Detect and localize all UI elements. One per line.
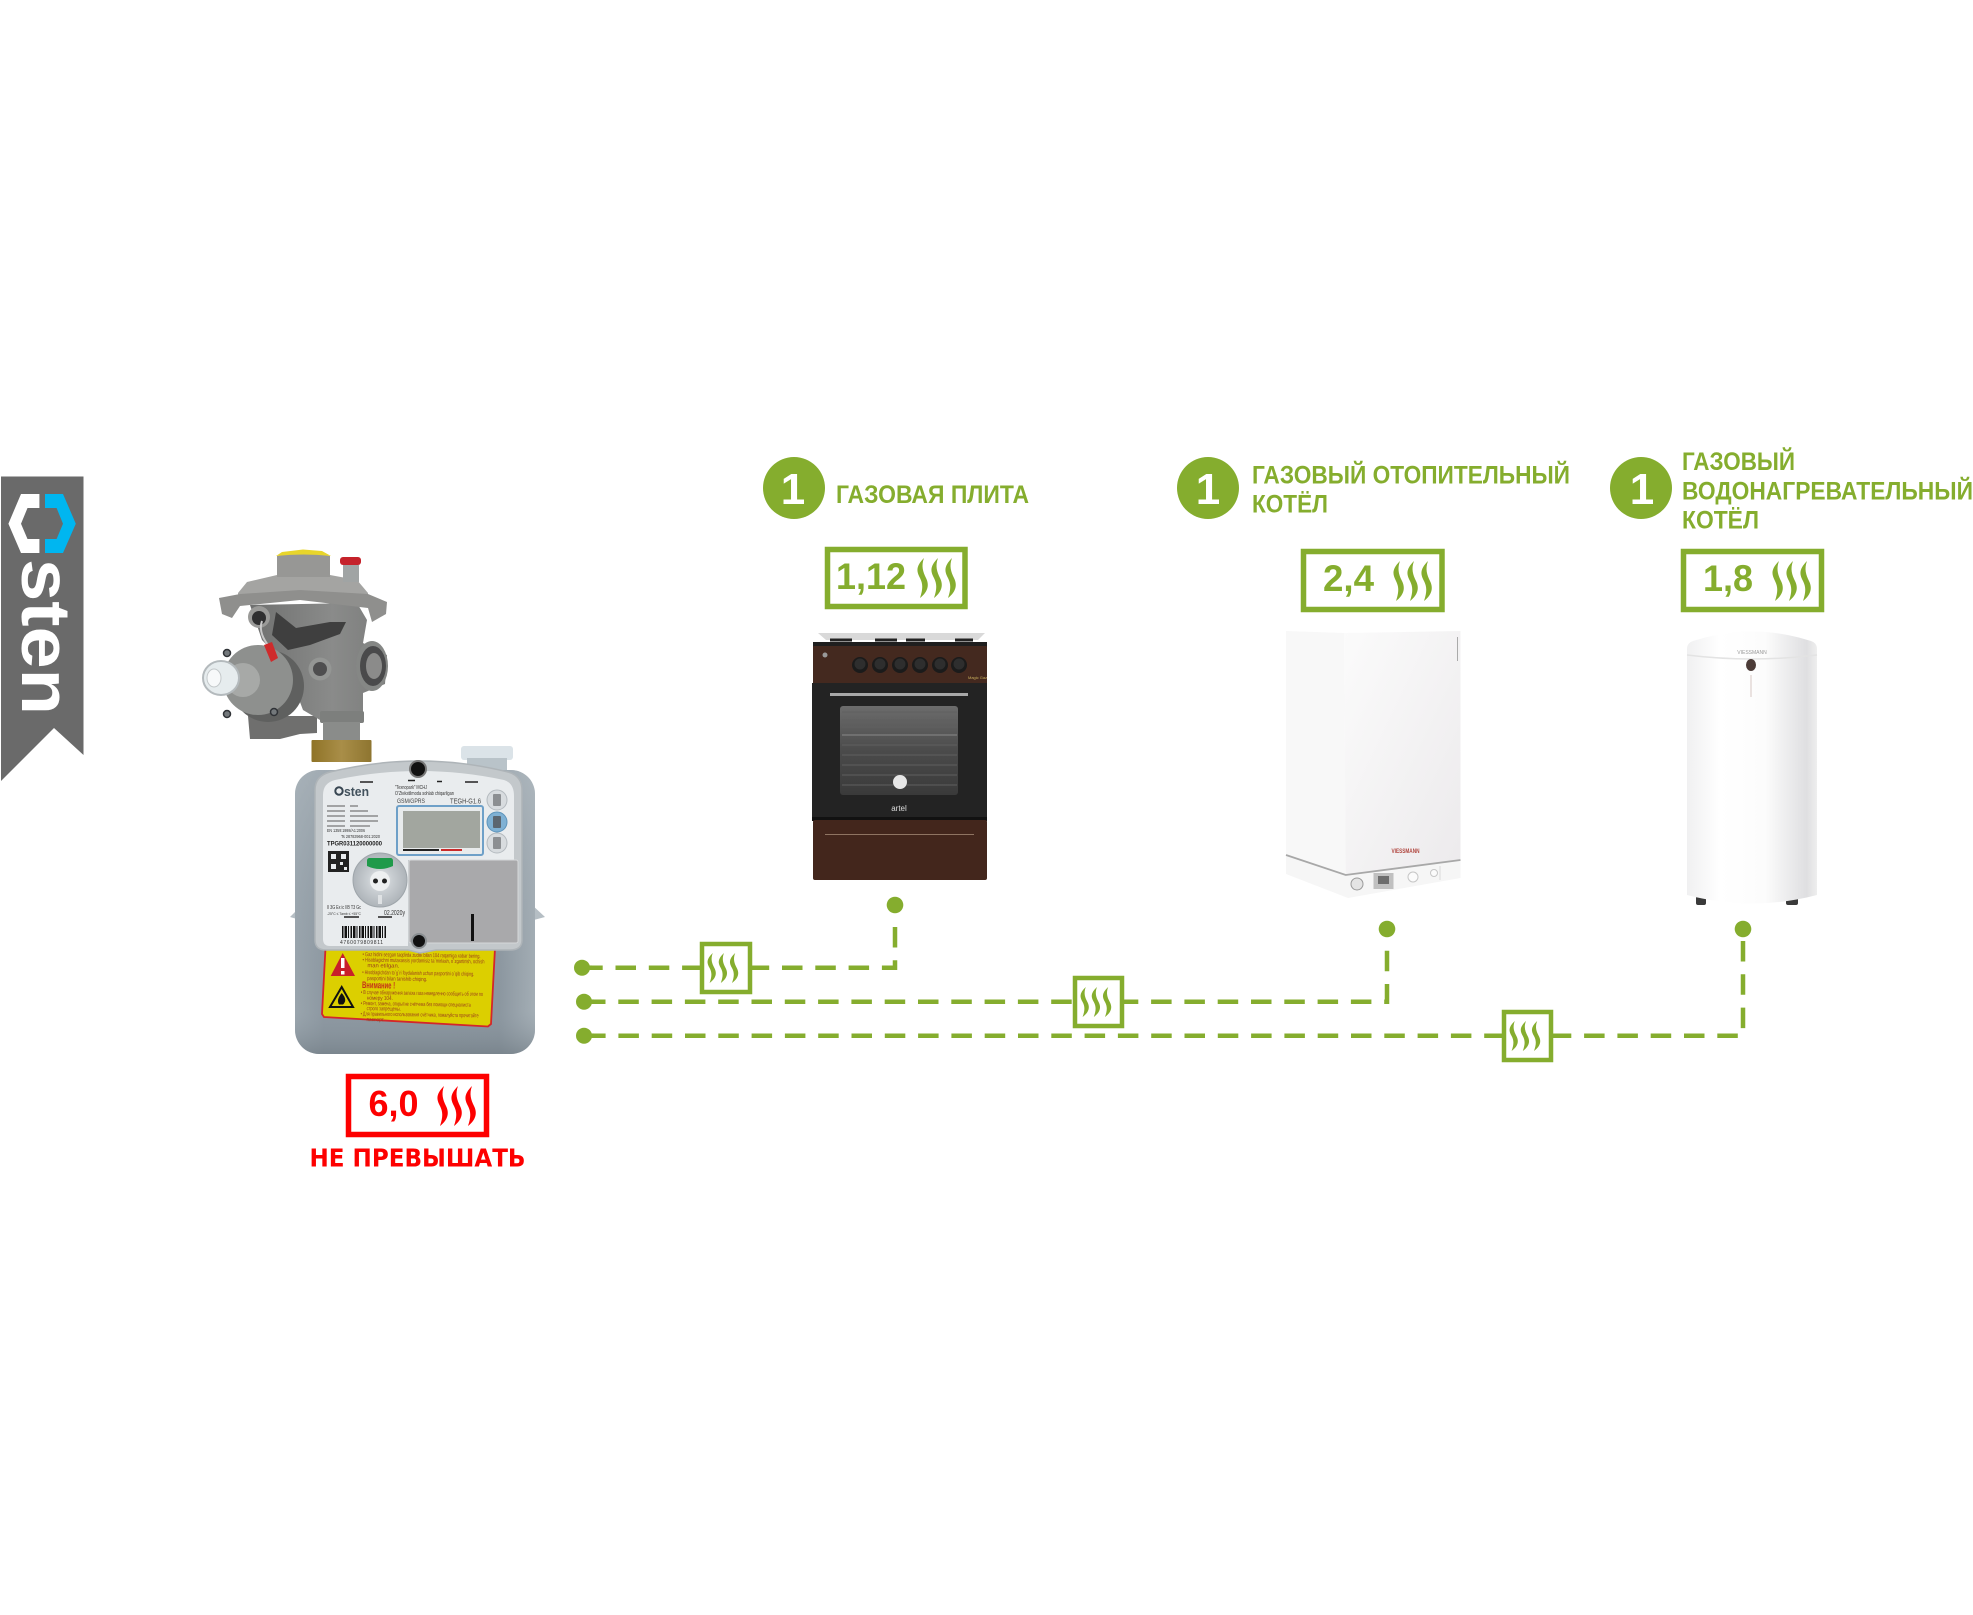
bottom casting [248, 716, 317, 739]
start dot [576, 994, 592, 1010]
meter technical data: TEGH-G1.6 [450, 796, 481, 806]
meter technical data: "Texnopark" MCHJ [395, 785, 427, 791]
warning text: • Hisoblagichdan to`g`ri foydalanish uchun pasportini o`qib chiqing. [362, 970, 475, 978]
bottom seal bolt [412, 934, 426, 948]
consumption box [1304, 552, 1442, 610]
brass nut [312, 740, 372, 762]
barcode: 4760079809811 [340, 940, 384, 946]
flange [219, 590, 387, 622]
meter technical data: TPGR031120000000 [327, 842, 383, 848]
clear bulb [203, 661, 239, 695]
meter buttons [487, 790, 507, 853]
wire and red seal [261, 621, 278, 662]
consumption box [1684, 552, 1822, 610]
warning text: паспорт. [366, 1017, 385, 1023]
screws [224, 650, 278, 718]
warning text: • В случае обнаружения запаха газа немедленно сообщить об этом по [361, 990, 483, 998]
connection line 1: stove [574, 897, 903, 992]
logo ribbon: sten [1, 476, 85, 781]
top cap [277, 553, 330, 577]
flow meter icon [702, 944, 750, 992]
warning label [322, 948, 495, 1026]
meter technical data: Ts 28783968-001:2020 [341, 834, 380, 839]
ribbon background [1, 476, 84, 781]
flow meter icon [1075, 978, 1122, 1026]
heat icon: red [437, 1086, 476, 1126]
flow meter icon [1504, 1012, 1551, 1060]
consumption box: 1,8 [1703, 558, 1753, 599]
warning text [360, 952, 485, 1025]
lower pipe [320, 711, 364, 723]
LCD display [397, 806, 483, 855]
meter technical data [327, 785, 481, 848]
heading [1682, 446, 1973, 534]
meter nameplate [323, 771, 514, 946]
production info: II 3G Ex ic IIB T3 Gc [327, 905, 361, 911]
main body [250, 603, 387, 720]
appliance 1: gas stove [763, 457, 1029, 880]
number badge [1177, 457, 1239, 519]
warning text: • Hisoblagichni mutaxassis yordamisiz ta`mirlash, o`zgartirish, ochish [362, 958, 484, 965]
start dot [574, 960, 590, 976]
meter side flange [290, 903, 545, 921]
meter technical data: GSM/GPRS [397, 799, 425, 805]
heading [1252, 460, 1570, 518]
production info [327, 905, 405, 917]
warning text: • Gaz hidini sezgan taqdirda zudlik bilan 104 raqamiga xabar bering. [363, 952, 481, 960]
limit value: 6,0 [368, 1083, 418, 1124]
meter technical data: O'Ztekstilmoda sohlab chiqarilgan [395, 791, 454, 797]
yellow seal [276, 550, 331, 556]
red limit box [348, 1076, 486, 1134]
boiler illustration: VIESSMANN [1392, 849, 1420, 855]
end dot [887, 897, 903, 913]
dome cone [238, 575, 368, 598]
water heater illustration: VIESSMANN [1737, 650, 1767, 656]
battery cover [409, 860, 518, 943]
stove illustration: artel [891, 804, 907, 813]
warning text: строго запрещены. [367, 1006, 401, 1013]
end dot [1379, 921, 1395, 937]
heading: ГАЗОВАЯ ПЛИТА [836, 481, 1029, 509]
consumption box [828, 550, 965, 606]
large port [356, 641, 388, 691]
warning text: • Ремонт, замена, открытие счётчика без помощи специалиста [361, 1001, 471, 1009]
warning text: pasportini bilan tanishib chiqing. [367, 976, 428, 983]
heading: ГАЗОВЫЙ [1682, 446, 1795, 476]
stove illustration [812, 633, 987, 880]
heading: КОТЁЛ [1252, 490, 1328, 518]
heading: КОТЁЛ [1682, 506, 1759, 534]
number badge [763, 457, 825, 519]
small port [308, 658, 332, 680]
production info: -25°C ≤ Tamb ≤ +55°C [327, 911, 361, 916]
heading: ГАЗОВЫЙ ОТОПИТЕЛЬНЫЙ [1252, 460, 1570, 490]
left valve disc [223, 645, 304, 722]
meter body [295, 770, 535, 1054]
warning text: man etilgan. [367, 963, 400, 970]
brand text on meter: sten [344, 784, 369, 799]
water heater illustration [1687, 632, 1817, 905]
meter front plate [315, 761, 522, 953]
limit caption: НЕ ПРЕВЫШАТЬ [310, 1144, 526, 1172]
appliance 2: heating boiler [1177, 457, 1570, 898]
boiler illustration [1286, 631, 1460, 898]
meter outlet connector [461, 746, 513, 772]
production info: 02.2020y [384, 910, 405, 917]
dial [353, 853, 407, 907]
number badge: 1 [781, 465, 805, 514]
barcode [340, 932, 386, 946]
meter technical data: EN 1359:1998/A1:2006 [327, 828, 365, 833]
appliance 3: water heater [1610, 446, 1973, 905]
consumption box: 2,4 [1323, 558, 1374, 599]
connection line 2: boiler [576, 921, 1395, 1026]
logo wordmark: sten [7, 559, 85, 715]
warning text: Внимание ! [362, 980, 395, 992]
body shadow [272, 612, 346, 650]
gas meter [290, 746, 545, 1054]
logo mark: hexagon brackets [8, 494, 76, 553]
end dot [1735, 921, 1751, 937]
start dot [576, 1028, 592, 1044]
warning text: • Для правильного использования счётчика, пожалуйста прочитайте [361, 1011, 479, 1019]
consumption box: 1,12 [836, 556, 906, 597]
red cap valve [340, 557, 361, 582]
number badge: 1 [1196, 465, 1220, 514]
connection line 3: water heater [576, 921, 1751, 1060]
gas regulator photo illustration [203, 550, 388, 762]
number badge [1610, 457, 1672, 519]
top seal bolt [410, 761, 426, 777]
warning text: номеру 104. [367, 996, 393, 1002]
QR code [328, 851, 349, 872]
number badge: 1 [1630, 465, 1654, 514]
stove illustration: Magic Gaz [968, 675, 987, 680]
left port [248, 606, 270, 628]
